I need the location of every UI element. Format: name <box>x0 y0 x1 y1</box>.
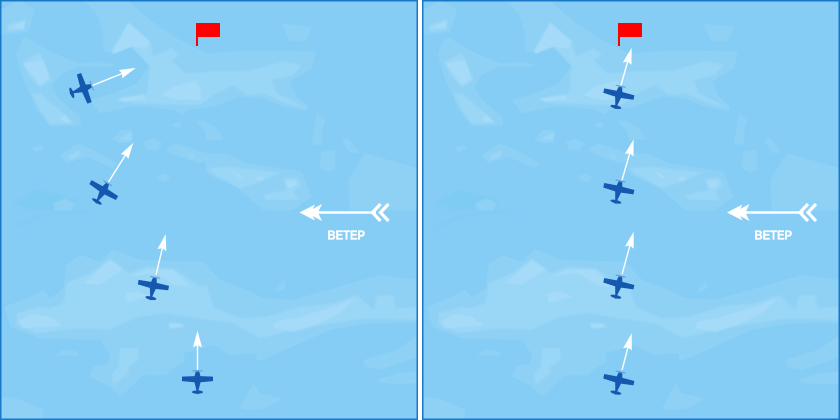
plane 1 with heading arrow <box>600 46 636 112</box>
panel: right, headings corrected for wind <box>422 0 840 420</box>
arrow: wind direction <box>300 204 388 221</box>
panel: left, headings with drift <box>0 0 418 420</box>
plane 2 with heading arrow <box>600 138 638 207</box>
wind label: ВЕТЕР <box>328 228 365 242</box>
plane 3 with heading arrow <box>135 233 170 303</box>
plane 3 with heading arrow <box>600 231 638 302</box>
plane 4 with heading arrow <box>182 331 213 394</box>
icon: target flag <box>618 23 642 46</box>
icon: target flag <box>196 23 220 46</box>
plane 1 with heading arrow <box>65 64 137 108</box>
plane 2 with heading arrow <box>83 140 137 211</box>
plane 4 with heading arrow <box>600 332 636 398</box>
wind label: ВЕТЕР <box>754 228 792 242</box>
arrow: wind direction <box>727 204 816 221</box>
